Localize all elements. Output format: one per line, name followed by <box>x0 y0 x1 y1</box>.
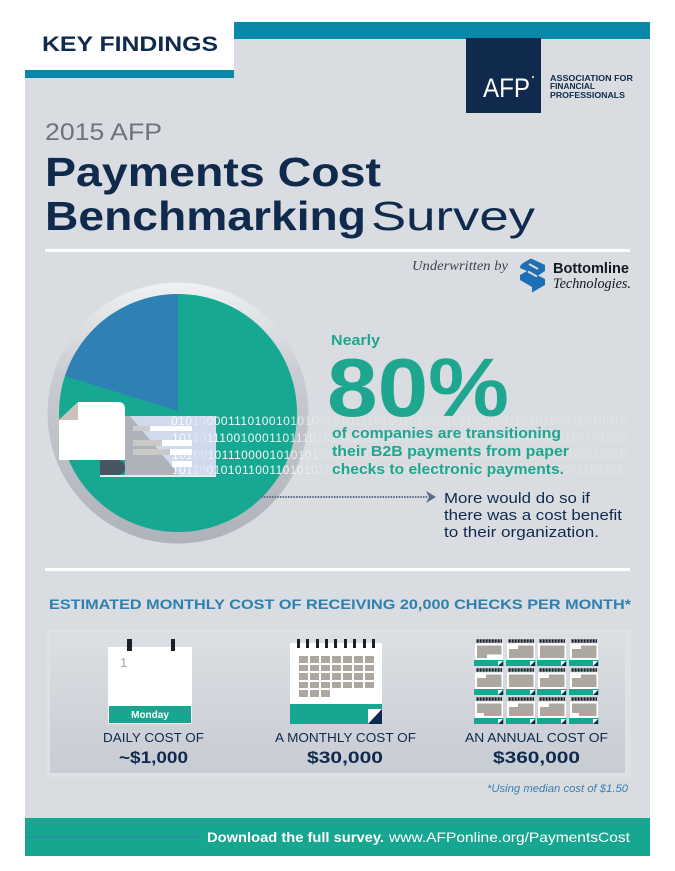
icon: Bottomline logo mark <box>520 258 545 292</box>
annual cost label: $360,000 <box>493 748 580 767</box>
binary data stream <box>171 414 627 477</box>
monthly cost label: $30,000 <box>307 748 383 767</box>
headline statistic: 80% <box>327 341 509 434</box>
underwriter credit: Technologies. <box>553 276 631 292</box>
footer band: www.AFPonline.org/PaymentsCost <box>388 829 630 845</box>
icon: paper check turning digital <box>59 402 216 477</box>
key findings tab: KEY FINDINGS <box>42 33 218 56</box>
binary data stream: 10110010101100110101010101011010101100101011010101001011001101101 <box>172 463 624 477</box>
AFP logo <box>466 38 633 113</box>
binary data stream: 01010000111010010101001010111010010100011010100011010100011010010 <box>171 414 627 428</box>
annual cost label <box>465 730 608 767</box>
title: Benchmarking <box>45 193 366 239</box>
title: Payments Cost <box>45 149 381 195</box>
cost benefit note: there was a cost benefit <box>444 507 623 524</box>
daily calendar <box>108 639 192 724</box>
AFP logo: AFP <box>483 73 530 103</box>
footer band: Download the full survey. <box>207 829 384 845</box>
arrow <box>261 491 436 503</box>
underwriter credit <box>412 258 631 292</box>
daily calendar: 1 <box>120 655 127 670</box>
underwriter credit: Underwritten by <box>412 259 509 274</box>
AFP logo: ASSOCIATION FOR <box>550 74 633 83</box>
headline statistic: of companies are transitioning <box>332 425 561 442</box>
annual calendars <box>474 641 598 724</box>
daily calendar: Monday <box>131 710 169 721</box>
AFP logo: FINANCIAL <box>550 82 595 91</box>
title: Survey <box>371 193 536 239</box>
footer band <box>25 818 650 856</box>
daily cost label <box>103 730 204 767</box>
daily cost label: ~$1,000 <box>119 748 188 767</box>
annual cost label: AN ANNUAL COST OF <box>465 730 608 745</box>
headline statistic: checks to electronic payments. <box>332 461 564 478</box>
cost panel <box>47 630 631 777</box>
key findings tab <box>25 22 234 78</box>
cost benefit note: More would do so if <box>444 490 591 507</box>
footnote: *Using median cost of $1.50 <box>487 783 629 795</box>
AFP logo: PROFESSIONALS <box>550 91 626 100</box>
cost benefit note: to their organization. <box>444 524 599 541</box>
cost benefit note <box>444 490 623 541</box>
monthly cost label <box>275 730 416 767</box>
monthly calendar <box>290 639 382 724</box>
section heading: ESTIMATED MONTHLY COST OF RECEIVING 20,000 CHECKS PER MONTH* <box>49 596 632 612</box>
title <box>45 119 536 239</box>
headline statistic: Nearly <box>331 332 381 349</box>
daily cost label: DAILY COST OF <box>103 730 204 745</box>
top band <box>234 22 650 39</box>
binary data stream: 10100101110000101010101010101100101010110101010100101001010110110 <box>172 448 627 462</box>
title: 2015 AFP <box>45 119 162 146</box>
binary data stream: 10110111001000110111010101001011000101101010010101010010110101000 <box>172 431 627 445</box>
underwriter credit: Bottomline <box>553 260 629 277</box>
monthly cost label: A MONTHLY COST OF <box>275 730 416 745</box>
headline statistic <box>327 332 569 478</box>
headline statistic: their B2B payments from paper <box>332 443 569 460</box>
pie chart <box>48 282 308 544</box>
